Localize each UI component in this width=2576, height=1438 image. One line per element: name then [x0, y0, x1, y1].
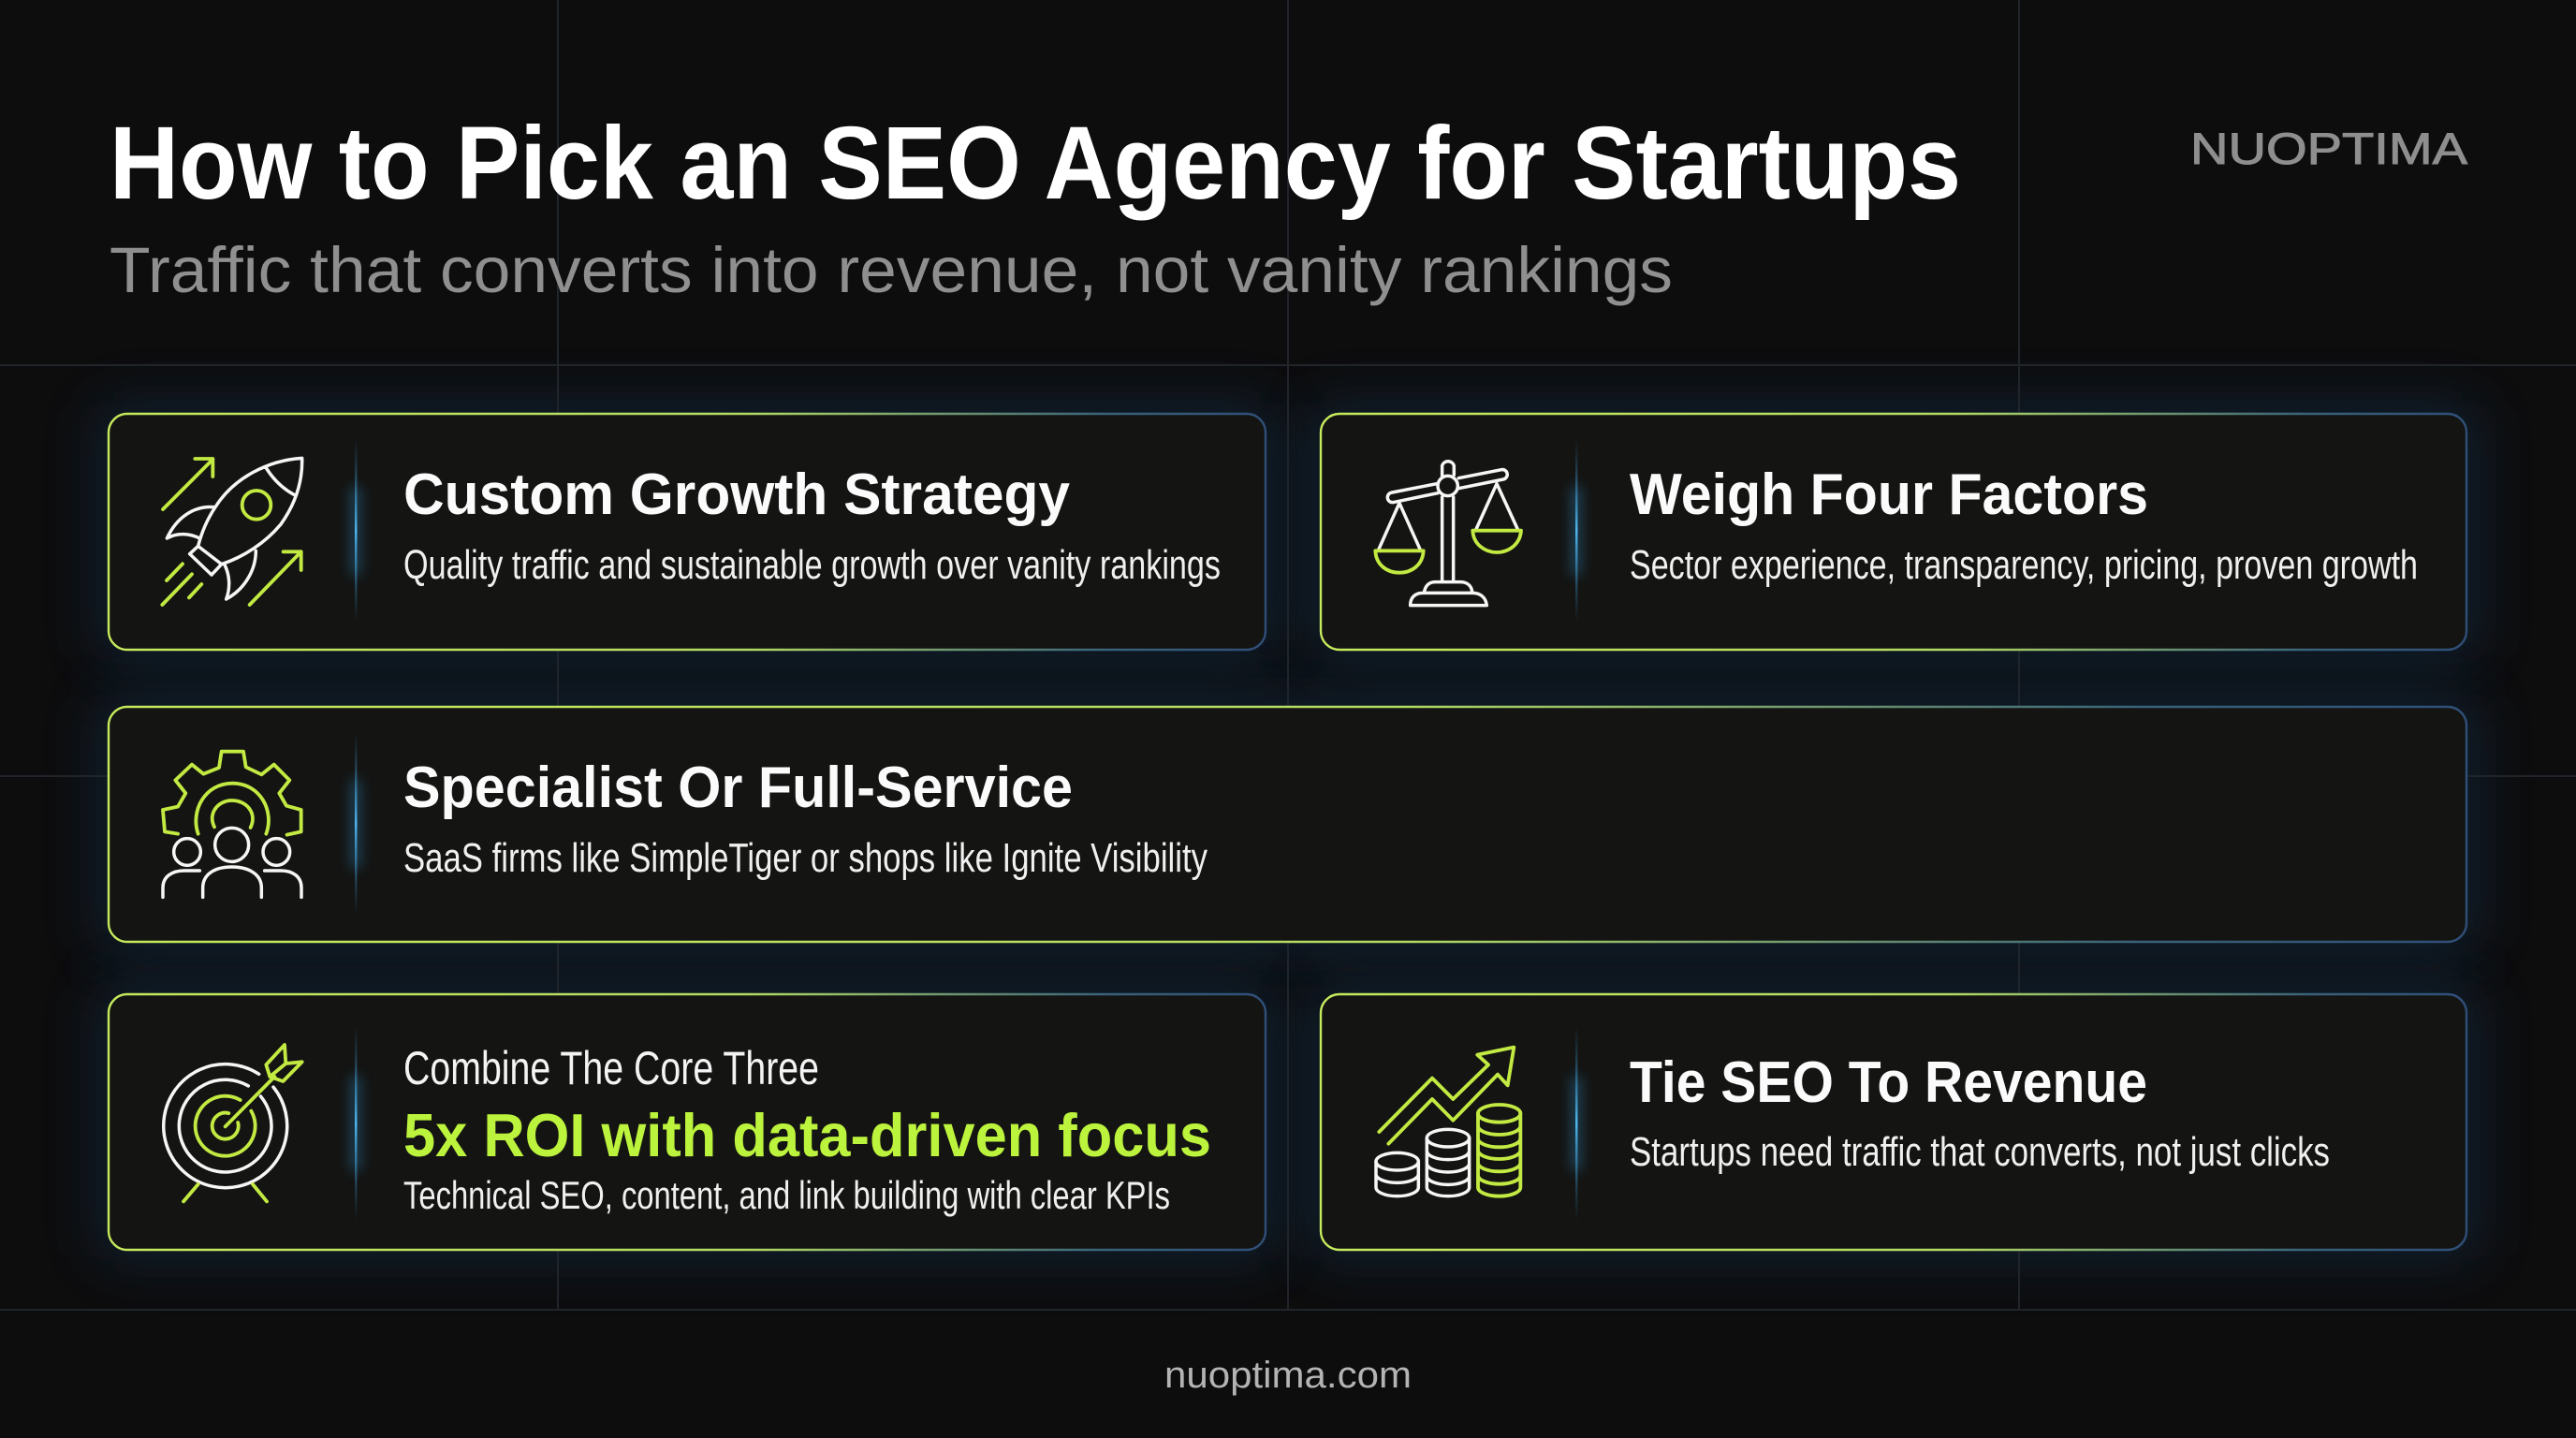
- panel: combine the core three: [109, 994, 1266, 1250]
- highlight stat: 5x ROI with data-driven focus: [403, 1101, 1211, 1169]
- card frame: [1321, 994, 2466, 1250]
- icon: gear and team: [163, 752, 301, 897]
- blue glow behind cards: [97, 403, 2479, 1260]
- heading: Specialist Or Full-Service: [403, 756, 1073, 820]
- heading: Weigh Four Factors: [1630, 462, 2148, 527]
- description: SaaS firms like SimpleTiger or shops like Ignite Visibility: [403, 835, 1208, 881]
- panel: weigh four factors: [1321, 414, 2466, 650]
- card frame: [1321, 414, 2466, 650]
- description: Quality traffic and sustainable growth over vanity rankings: [403, 542, 1221, 588]
- panel: specialist or full-service: [109, 707, 2466, 942]
- description: Technical SEO, content, and link building with clear KPIs: [403, 1173, 1170, 1217]
- icon: target and arrow: [164, 1045, 302, 1201]
- card frame: [109, 707, 2466, 942]
- divider: [1573, 438, 1580, 624]
- eyebrow label: Combine The Core Three: [403, 1042, 819, 1094]
- divider: [352, 438, 359, 624]
- heading: Custom Growth Strategy: [403, 462, 1070, 527]
- icon: rocket: [162, 458, 302, 605]
- divider: [1573, 1025, 1580, 1222]
- card frame: [109, 414, 1266, 650]
- card frame: [109, 994, 1266, 1250]
- icon: coins and growth arrow: [1376, 1048, 1520, 1196]
- title: How to Pick an SEO Agency for Startups: [110, 106, 1961, 221]
- panel: tie seo to revenue: [1321, 994, 2466, 1250]
- divider: [352, 1025, 359, 1222]
- panel: custom growth strategy: [109, 414, 1266, 650]
- description: Startups need traffic that converts, not just clicks: [1630, 1129, 2330, 1175]
- subtitle: Traffic that converts into revenue, not vanity rankings: [110, 234, 1673, 306]
- divider: [352, 732, 359, 916]
- heading: Tie SEO To Revenue: [1630, 1050, 2147, 1115]
- footer url: nuoptima.com: [1164, 1355, 1412, 1396]
- brand logo: NUOPTIMA: [2190, 124, 2468, 173]
- icon: balance scales: [1375, 462, 1521, 606]
